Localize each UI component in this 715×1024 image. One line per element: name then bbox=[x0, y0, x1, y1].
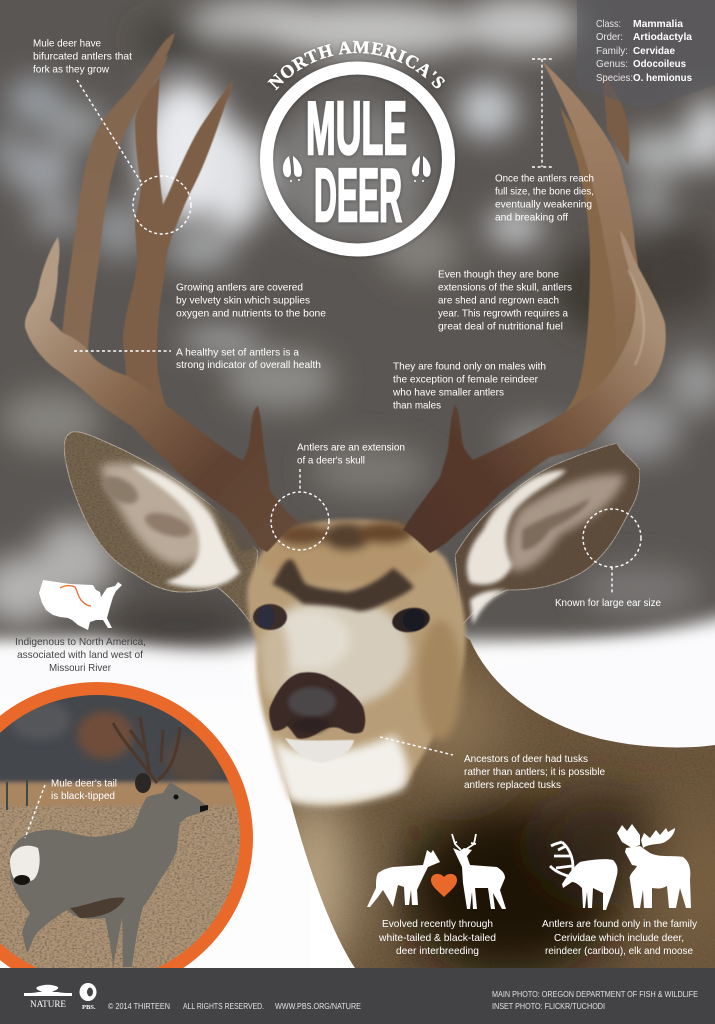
head and face bbox=[247, 520, 466, 805]
curved heading: NORTH AMERICA'S bbox=[267, 40, 446, 90]
taxonomy panel: Genus: bbox=[596, 59, 628, 70]
title badge: MULE bbox=[306, 86, 407, 170]
callout: healthy antlers: A healthy set of antlers is a bbox=[176, 348, 299, 358]
icon: buck silhouette bbox=[452, 834, 506, 909]
callout: healthy antlers bbox=[74, 348, 321, 371]
left eye bbox=[253, 604, 287, 630]
text: antlers only in family: Antlers are found only in the family bbox=[542, 919, 698, 930]
text: evolved recently: deer interbreeding bbox=[396, 946, 479, 957]
neck and body bbox=[286, 636, 715, 968]
second tine bbox=[560, 108, 616, 411]
taxonomy panel: Odocoileus bbox=[633, 59, 686, 70]
callout: full size antlers: and breaking off bbox=[495, 212, 568, 224]
logo: PBS: PBS. bbox=[82, 1004, 96, 1011]
antler highlight bbox=[628, 270, 644, 365]
inset deer bbox=[10, 717, 208, 967]
callout: males only: than males bbox=[393, 400, 441, 412]
icon: orange heart bbox=[431, 874, 457, 897]
white lip bbox=[285, 738, 354, 763]
callout: ear size: Known for large ear size bbox=[555, 598, 661, 609]
callout: extension of skull bbox=[271, 442, 405, 550]
long tine bbox=[62, 33, 175, 350]
inset callout bbox=[25, 778, 117, 838]
callout: ancestors had tusks: Ancestors of deer had tusks bbox=[464, 754, 588, 765]
photo credits: INSET PHOTO: FLICKR/TUCHODI bbox=[492, 1001, 605, 1011]
taxonomy panel: Mammalia bbox=[633, 19, 683, 30]
callout: bifurcated antlers bbox=[33, 38, 191, 234]
icon: right hoofprint bbox=[412, 156, 431, 182]
icon: doe silhouette bbox=[367, 850, 440, 907]
callout: shed and regrow: year. This regrowth requires a bbox=[438, 308, 568, 320]
taxonomy panel bbox=[577, 0, 715, 110]
ring bbox=[266, 68, 448, 250]
right ear bbox=[455, 443, 640, 625]
taxonomy panel: Artiodactyla bbox=[633, 32, 692, 43]
callout: full size antlers: Once the antlers reach bbox=[495, 174, 594, 184]
photo credits bbox=[492, 989, 698, 1011]
callout: bifurcated antlers: Mule deer have bbox=[33, 38, 101, 50]
callout: velvety skin: by velvety skin which supplies bbox=[176, 296, 310, 306]
callout: males only bbox=[392, 362, 546, 412]
callout: full size antlers bbox=[495, 59, 594, 224]
main beam and tip bbox=[403, 230, 666, 553]
callout: velvety skin: Growing antlers are covered bbox=[176, 282, 303, 294]
text: indigenous to North America bbox=[16, 638, 145, 671]
callout: bifurcated antlers: bifurcated antlers that bbox=[33, 52, 132, 62]
icon: moose silhouette bbox=[617, 824, 691, 908]
copyright: © 2014 THIRTEEN bbox=[108, 1001, 170, 1011]
copyright: ALL RIGHTS RESERVED. bbox=[183, 1001, 264, 1011]
text: antlers only in family: reindeer (caribou), elk and moose bbox=[545, 946, 693, 957]
taxonomy panel: Order: bbox=[596, 32, 623, 43]
logo: Nature: NATURE bbox=[30, 999, 67, 1009]
callout: ancestors had tusks: rather than antlers; it is possible bbox=[464, 767, 605, 778]
copyright bbox=[108, 1001, 361, 1011]
callout: males only: who have smaller antlers bbox=[392, 388, 504, 398]
callout: males only: They are found only on males with bbox=[393, 362, 546, 372]
left antler bbox=[25, 33, 298, 552]
logo: Nature bbox=[24, 985, 72, 1009]
callout: full size antlers: full size, the bone dies, bbox=[495, 186, 594, 198]
callout: ancestors had tusks bbox=[380, 737, 605, 791]
map: United States with Missouri River bbox=[39, 580, 122, 630]
inset callout: is black-tipped bbox=[51, 791, 115, 802]
icon: left hoofprint bbox=[283, 156, 302, 182]
callout: velvety skin bbox=[176, 282, 326, 320]
muzzle and nose bbox=[269, 672, 365, 739]
callout: extension of skull: Antlers are an extension bbox=[297, 442, 405, 454]
callout: bifurcated antlers: fork as they grow bbox=[33, 64, 109, 76]
taxonomy panel: O. hemionus bbox=[633, 73, 692, 84]
text: indigenous to North America: associated with land west of bbox=[17, 650, 143, 661]
callout: full size antlers: eventually weakening bbox=[495, 200, 592, 210]
callout: shed and regrow: great deal of nutritional fuel bbox=[438, 322, 563, 332]
right eye bbox=[391, 607, 430, 633]
icon: caribou silhouette bbox=[550, 842, 618, 910]
back tine bbox=[600, 70, 629, 165]
inset callout: Mule deer's tail bbox=[51, 778, 117, 790]
callout: males only: the exception of female reindeer bbox=[393, 374, 539, 386]
dark brow patch bbox=[272, 559, 414, 611]
main beam and tip bbox=[25, 237, 298, 552]
copyright: WWW.PBS.ORG/NATURE bbox=[275, 1001, 361, 1011]
text: antlers only in family bbox=[542, 919, 698, 957]
right antler bbox=[403, 62, 666, 553]
footer bbox=[0, 968, 715, 1024]
title badge bbox=[258, 40, 456, 258]
white chin and chest bbox=[272, 735, 408, 804]
callout: healthy antlers: strong indicator of overall health bbox=[176, 360, 321, 371]
taxonomy panel: Family: bbox=[596, 46, 628, 57]
snow foreground bbox=[0, 604, 715, 673]
left ear bbox=[64, 432, 258, 622]
callout: shed and regrow: Even though they are bone bbox=[438, 270, 559, 280]
taxonomy panel: Cervidae bbox=[633, 46, 675, 57]
callout: ear size bbox=[555, 509, 661, 609]
taxonomy panel: Class: bbox=[596, 19, 621, 30]
callout: ancestors had tusks: antlers replaced tusks bbox=[464, 780, 561, 791]
callout: velvety skin: oxygen and nutrients to the bone bbox=[176, 308, 326, 320]
text: indigenous to North America: Indigenous to North America, bbox=[15, 637, 146, 648]
taxonomy panel: Species: bbox=[596, 73, 633, 84]
forked centre tine bbox=[123, 77, 233, 412]
callout: shed and regrow bbox=[438, 270, 572, 332]
title badge: DEER bbox=[314, 153, 402, 237]
inset: orange ring and tail photo bbox=[0, 682, 253, 994]
inset antlers bbox=[113, 717, 180, 783]
long tine bbox=[543, 62, 638, 358]
text: indigenous to North America: Missouri River bbox=[49, 663, 111, 674]
text: evolved recently bbox=[378, 919, 496, 957]
text: antlers only in family: Cerividae which include deer, bbox=[554, 933, 684, 944]
callout: shed and regrow: are shed and regrown each bbox=[438, 296, 559, 306]
text: evolved recently: white-tailed & black-tailed bbox=[378, 933, 496, 944]
logo: PBS bbox=[80, 983, 96, 1011]
callout: extension of skull: of a deer's skull bbox=[297, 456, 365, 466]
text: evolved recently: Evolved recently through bbox=[382, 919, 493, 930]
callout: shed and regrow: extensions of the skull, antlers bbox=[438, 282, 572, 294]
